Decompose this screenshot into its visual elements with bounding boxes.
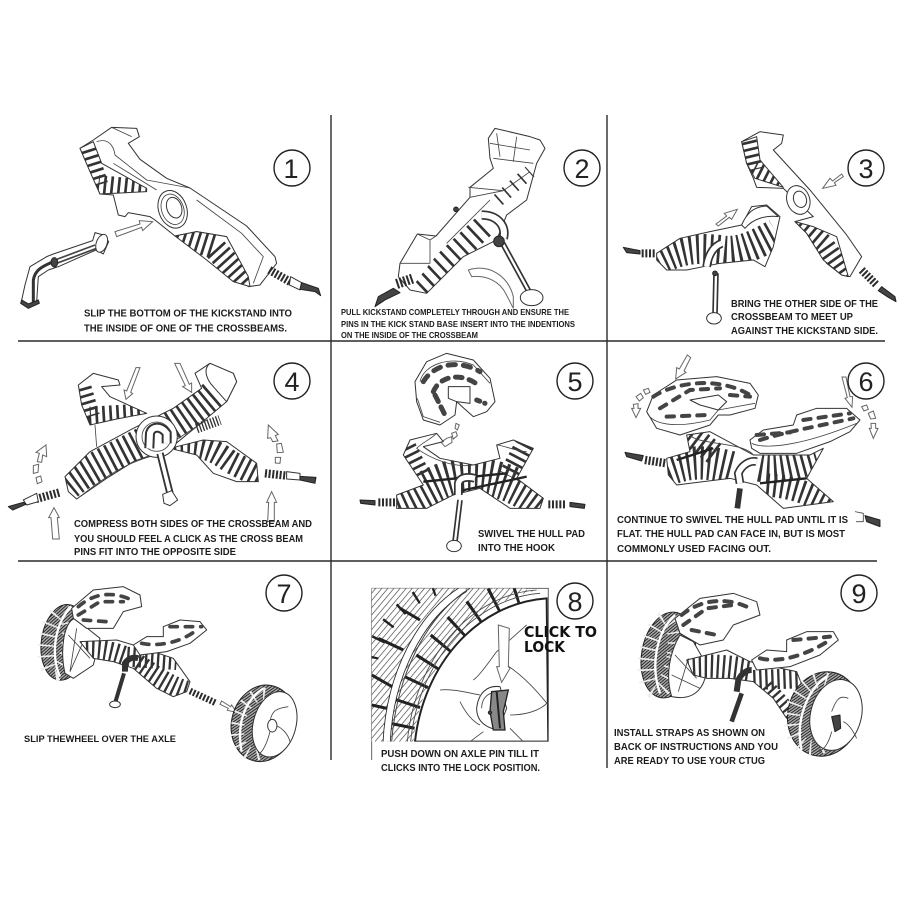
panel: step 3 [623,132,896,337]
step number 6: 6 [858,367,874,397]
instructions text: INSTALL STRAPS AS SHOWN ON [614,728,765,739]
instructions text: CLICKS INTO THE LOCK POSITION. [381,763,540,774]
panel: step 7 [24,575,304,769]
instructions text: SLIP THE BOTTOM OF THE KICKSTAND INTO [84,308,292,320]
instructions text: BRING THE OTHER SIDE OF THE [731,299,878,310]
illustration: kickstand pulled through crossbeam [375,128,545,308]
instructions text: PINS IN THE KICK STAND BASE INSERT INTO THE INDENTIONS [341,319,575,329]
step number 8: 8 [567,587,583,617]
instructions text: AGAINST THE KICKSTAND SIDE. [731,326,878,337]
instructions text: YOU SHOULD FEEL A CLICK AS THE CROSS BEAM [74,534,303,545]
callout: click to lock [524,623,597,656]
instructions text [478,529,585,554]
instructions text: COMPRESS BOTH SIDES OF THE CROSSBEAM AND [74,519,312,530]
step number 1: 1 [283,154,299,184]
arrow [115,221,153,237]
instructions text: PINS FIT INTO THE OPPOSITE SIDE [74,547,236,558]
panel: step 9 [614,575,877,767]
illustration: axle pin close-up [372,588,548,760]
instructions text [74,519,312,558]
illustration: crossbeam and kickstand [21,127,321,308]
panel: step 2 [341,128,600,340]
instructions text: CROSSBEAM TO MEET UP [731,312,853,323]
illustration: completed cart [635,593,870,765]
panel: step 5 [360,353,593,554]
callout: click to lock: CLICK TO [524,623,597,641]
step number 3: 3 [858,154,874,184]
instructions text: FLAT. THE HULL PAD CAN FACE IN, BUT IS MOST [617,529,845,540]
step number 7: 7 [276,579,292,609]
instructions text [381,749,540,774]
arrow [220,701,237,712]
illustration: hull pads swivelled flat [625,355,880,527]
panel: step 1 [21,127,321,334]
instructions text: ON THE INSIDE OF THE CROSSBEAM [341,330,478,340]
instructions text: INTO THE HOOK [478,543,556,554]
instructions text: PULL KICKSTAND COMPLETELY THROUGH AND ENSURE THE [341,307,569,317]
instructions text [731,299,878,337]
step number 9: 9 [851,579,867,609]
instructions text: SWIVEL THE HULL PAD [478,529,585,540]
panel: step 8 [372,583,597,774]
instructions text: BACK OF INSTRUCTIONS AND YOU [614,742,778,753]
step number 6 [848,363,884,399]
illustration: crossbeams compressed [8,363,316,539]
instructions text [341,307,575,340]
step number 9 [841,575,877,611]
panel: step 6 [617,355,884,555]
instructions text: THE INSIDE OF ONE OF THE CROSSBEAMS. [84,324,287,334]
instructions text [617,515,848,555]
instructions text: COMMONLY USED FACING OUT. [617,544,771,555]
instructions text: CONTINUE TO SWIVEL THE HULL PAD UNTIL IT IS [617,515,848,526]
arrows [124,368,140,399]
step number 4: 4 [284,367,300,397]
instructions text [614,728,778,767]
step number 2 [564,150,600,186]
icon: wheel [223,678,304,769]
step number 7 [266,575,302,611]
step number 5 [557,363,593,399]
illustration: two crossbeams coming together [623,132,896,324]
step number 2: 2 [574,154,590,184]
step number 8 [557,583,593,619]
icon: wheel [778,663,870,765]
instructions text [84,308,292,334]
arrow [468,268,513,308]
step number 5: 5 [567,367,583,397]
instructions text: SLIP THEWHEEL OVER THE AXLE [24,734,176,745]
illustration: wheel slipped over axle [36,587,304,769]
step number 4 [274,363,310,399]
illustration: hull pad above assembled crossbeams [360,353,585,552]
panel: step 4 [8,363,316,558]
callout: click to lock: LOCK [524,638,566,656]
instructions text: ARE READY TO USE YOUR CTUG [614,756,765,767]
instructions text: PUSH DOWN ON AXLE PIN TILL IT [381,749,539,760]
step number 1 [274,150,310,186]
arrow [497,625,510,682]
arrows [676,355,691,379]
arrow [823,174,843,188]
step number 3 [848,150,884,186]
